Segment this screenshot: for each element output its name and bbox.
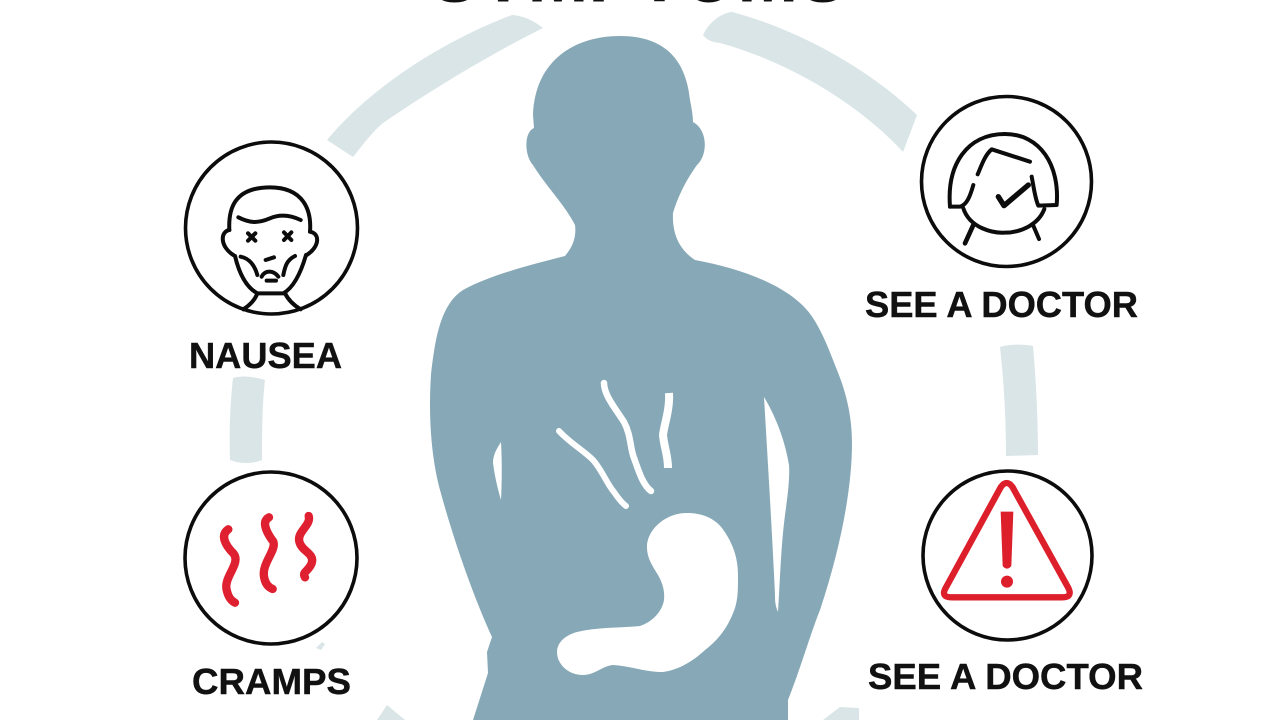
pain line right (663, 393, 669, 468)
symptom: cramps (185, 472, 357, 702)
cycle ring segments (230, 12, 1038, 720)
symptom: see a doctor (warning) (868, 471, 1143, 697)
stomach (557, 513, 738, 675)
gap between torso and right arm (764, 397, 789, 612)
doctor circle (922, 96, 1092, 266)
cramps circle (185, 472, 357, 644)
icon: red cramp squiggles (224, 516, 312, 603)
symptom: see a doctor (top) (865, 96, 1138, 325)
icon: dizzy face (223, 187, 317, 309)
icon: warning triangle (944, 483, 1070, 597)
nausea label: NAUSEA (189, 335, 342, 376)
nausea circle (186, 142, 358, 314)
warning circle (923, 471, 1092, 640)
cramps label: CRAMPS (192, 661, 351, 702)
see a doctor warning label: SEE A DOCTOR (868, 656, 1143, 697)
pain line left (559, 431, 626, 506)
icon: doctor head with check (950, 134, 1057, 243)
gap between torso and left arm (493, 442, 502, 500)
see a doctor label: SEE A DOCTOR (865, 284, 1138, 325)
symptom: nausea (186, 142, 358, 376)
human body silhouette (430, 36, 852, 720)
pain line middle (604, 383, 651, 491)
